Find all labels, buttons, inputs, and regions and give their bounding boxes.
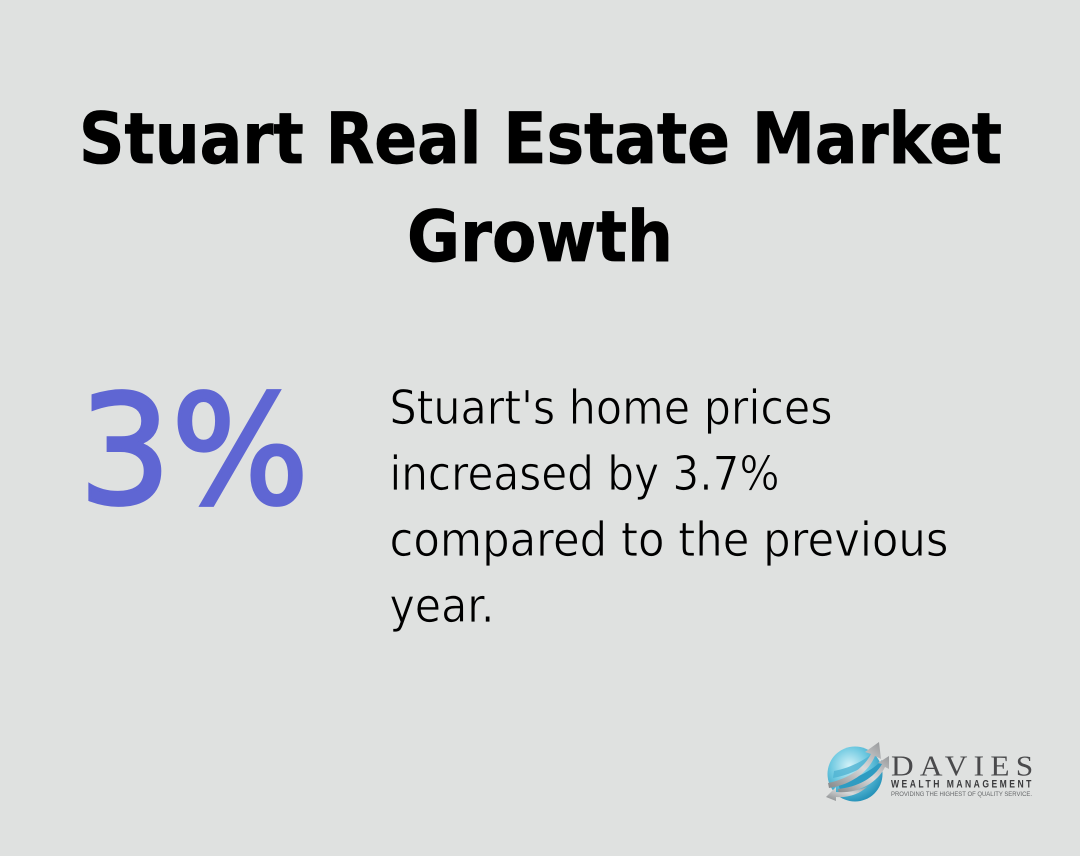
big statistic: 3%: 3%: [79, 363, 309, 539]
description text: compared to the previous: [390, 513, 948, 568]
tagline: PROVIDING THE HIGHEST OF QUALITY SERVICE.: [891, 791, 1032, 798]
wordmark subtitle: WEALTH MANAGEMENT: [891, 779, 1031, 791]
wordmark: DAVIES: [891, 752, 1033, 782]
description text: [390, 381, 948, 634]
title: [79, 98, 1002, 278]
icon: globe with arrows: [826, 742, 889, 802]
description text: increased by 3.7%: [390, 447, 780, 502]
title: Stuart Real Estate Market: [79, 98, 1002, 180]
description text: Stuart's home prices: [390, 381, 832, 436]
description text: year.: [390, 579, 494, 634]
title: Growth: [407, 196, 673, 278]
logo: Davies Wealth Management: [826, 742, 1033, 802]
